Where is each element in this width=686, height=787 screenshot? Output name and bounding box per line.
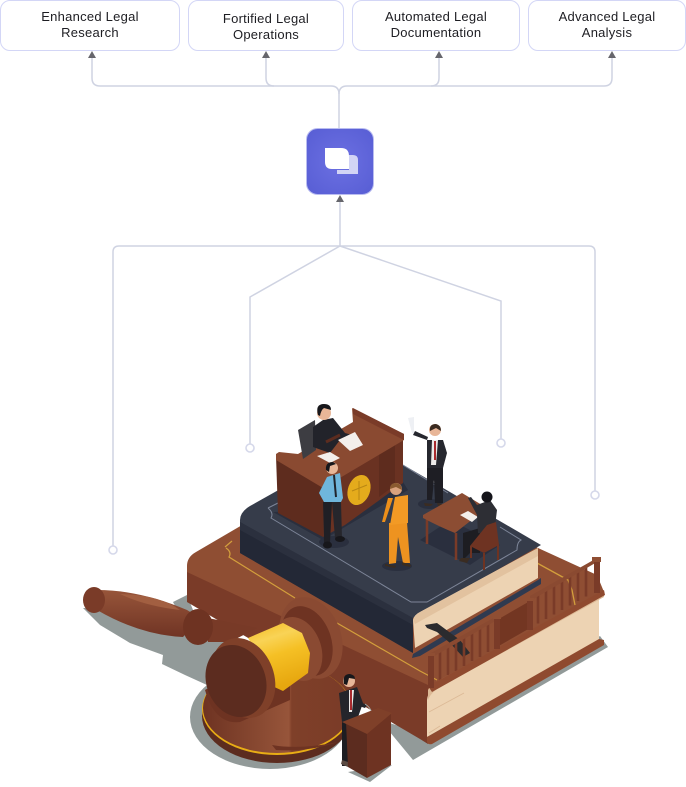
connector lines: top outputs bbox=[92, 57, 612, 128]
counsel table with seated man bbox=[423, 492, 499, 570]
guard figure bbox=[319, 462, 345, 548]
large brown law book bbox=[187, 462, 604, 744]
dark navy book bbox=[240, 442, 541, 658]
label: Enhanced Legal Research: Enhanced Legal bbox=[41, 9, 139, 24]
label: Automated Legal Documentation: Documentation bbox=[391, 25, 481, 40]
label: Automated Legal Documentation bbox=[352, 0, 520, 51]
connector lines: scene inputs bbox=[113, 202, 595, 546]
label: Enhanced Legal Research: Research bbox=[61, 25, 119, 40]
icon: central chat squares bbox=[306, 128, 374, 194]
label: Fortified Legal Operations bbox=[188, 0, 344, 51]
gavel handle bbox=[83, 587, 257, 645]
judge figure bbox=[298, 404, 363, 463]
label: Fortified Legal Operations: Operations bbox=[233, 27, 299, 42]
label: Advanced Legal Analysis: Analysis bbox=[582, 25, 632, 40]
standing lawyer figure bbox=[408, 417, 447, 506]
podium bbox=[342, 708, 392, 778]
label: Enhanced Legal Research bbox=[0, 0, 180, 51]
wooden railing bbox=[427, 557, 605, 692]
label: Advanced Legal Analysis bbox=[528, 0, 686, 51]
prisoner figure bbox=[382, 483, 411, 568]
label: Automated Legal Documentation: Automated Legal bbox=[385, 9, 487, 24]
gavel head bbox=[196, 588, 354, 727]
arrowhead: into icon bbox=[336, 195, 344, 202]
judge bench bbox=[276, 408, 404, 537]
ground shadows bbox=[83, 595, 608, 769]
label: Fortified Legal Operations: Fortified Legal bbox=[223, 11, 309, 26]
bookmark ribbon bbox=[425, 623, 470, 657]
gavel sound block bbox=[202, 663, 352, 763]
arrowheads: top outputs bbox=[88, 51, 616, 58]
label: Advanced Legal Analysis: Advanced Legal bbox=[559, 9, 655, 24]
speaker figure at podium bbox=[339, 674, 392, 782]
connector end nodes bbox=[109, 439, 599, 554]
